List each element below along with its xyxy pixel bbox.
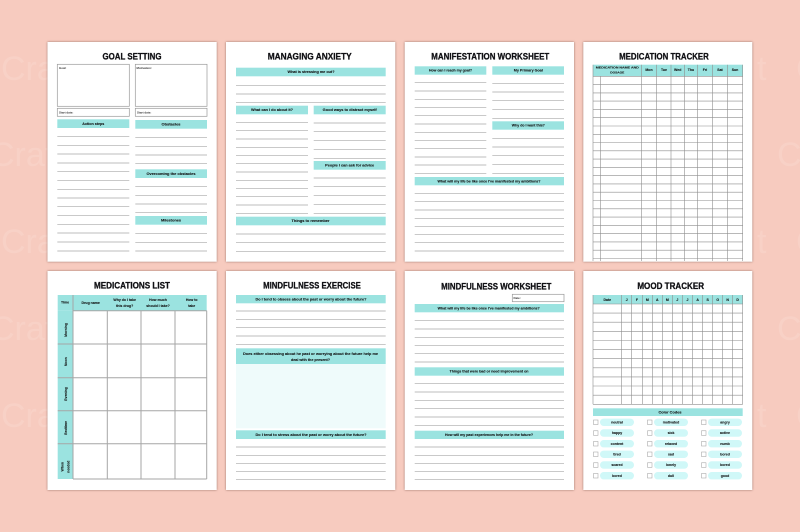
panel: managing anxiety <box>226 42 395 262</box>
mood header row: J <box>687 298 689 302</box>
why lines <box>492 138 564 173</box>
table header row: How much <box>149 298 167 302</box>
why header <box>492 121 564 130</box>
stress header <box>236 430 386 439</box>
present header <box>236 348 386 364</box>
color code key: lonely <box>666 463 676 467</box>
table header row <box>58 295 207 311</box>
panel: mindfulness exercise <box>226 271 395 490</box>
life header <box>415 177 564 185</box>
date box <box>512 294 564 302</box>
color code key: bored <box>720 463 730 467</box>
time column: Bedtime <box>64 421 68 435</box>
color code key: scared <box>611 463 623 467</box>
start date box right: Start date: <box>137 110 151 114</box>
panel: goal setting <box>48 42 217 262</box>
things to remember header: Things to remember <box>292 219 330 223</box>
tracker header row: DOSAGE <box>610 71 624 75</box>
heading: mood tracker: MOOD TRACKER <box>637 281 704 291</box>
overcoming the obstacles header: Overcoming the obstacles <box>146 172 196 176</box>
table header row: Drug name <box>82 301 100 305</box>
tracker header row: Wed <box>674 68 681 72</box>
heading: mindfulness exercise: MINDFULNESS EXERCISE <box>263 281 361 291</box>
people header: People I can ask for advice <box>325 163 374 167</box>
heading: manifestation worksheet: MANIFESTATION WORKSHEET <box>431 52 550 62</box>
heading: managing anxiety: MANAGING ANXIETY <box>268 52 352 62</box>
color codes header: Color Codes <box>658 410 682 414</box>
color code key: tired <box>613 452 621 456</box>
color code key: dull <box>668 474 674 478</box>
heading: medication tracker: MEDICATION TRACKER <box>619 52 709 62</box>
color code key: active <box>720 431 730 435</box>
table header row: take <box>188 304 195 308</box>
past experiences header <box>415 431 564 439</box>
mood header row: A <box>696 298 699 302</box>
motivation box: Motivation: <box>136 66 152 70</box>
color code key: motivated <box>663 420 679 424</box>
what can I do header: What can I do about it? <box>251 108 293 112</box>
life header: What will my life be like once I've manifested my ambitions? <box>438 179 540 183</box>
tracker header row: Tue <box>661 68 667 72</box>
color code key: angry <box>720 420 730 424</box>
writing area <box>236 364 386 428</box>
goal box <box>57 64 129 106</box>
watermark text: Craft <box>1 223 75 261</box>
mood header row: O <box>716 298 719 302</box>
obsess lines <box>236 311 386 344</box>
tracker header row <box>593 65 743 76</box>
time column: Morning <box>64 323 68 337</box>
tracker header row: Thu <box>688 68 694 72</box>
mood header row: M <box>666 298 669 302</box>
tracker header row: MEDICATION NAME AND <box>596 66 640 70</box>
time column: When <box>60 462 64 471</box>
stressing lines <box>236 85 386 103</box>
table header row: this drug? <box>116 304 133 308</box>
watermark text: Craft <box>1 50 75 88</box>
obsess header <box>236 295 386 303</box>
motivation box <box>135 64 207 106</box>
distract header: Good ways to distract myself <box>323 108 378 112</box>
remember lines <box>236 234 386 252</box>
improvement header <box>415 367 564 376</box>
color code key: good <box>721 474 729 478</box>
tracker header row: Sat <box>717 68 724 72</box>
panel: mindfulness worksheet <box>405 271 574 490</box>
watermark text: t <box>757 50 767 88</box>
past experiences header: How will my past experiences help me in the future? <box>445 433 533 437</box>
people lines <box>314 178 386 213</box>
obstacles lines <box>135 137 207 164</box>
obstacles header: Obstacles <box>162 122 181 126</box>
overcoming lines <box>135 187 207 213</box>
table header row: Why do I take <box>113 298 136 302</box>
milestones lines <box>135 233 207 251</box>
ambitions header: What will my life be like once I've manifested my ambitions? <box>438 306 540 310</box>
reach goal header <box>415 66 486 75</box>
panel: mood tracker <box>583 271 752 490</box>
mood header row: J <box>676 298 678 302</box>
watermark text: t <box>757 397 767 435</box>
color codes header <box>593 408 743 416</box>
color code key: neutral <box>611 420 623 424</box>
mood header row: M <box>646 298 649 302</box>
start date box left: Start date: <box>59 110 73 114</box>
color code key: bored <box>612 474 622 478</box>
present header: Does either obsessing about he past or worrying about the future help me <box>243 352 378 356</box>
distract header <box>314 106 386 114</box>
heading: mindfulness worksheet: MINDFULNESS WORKSHEET <box>441 281 552 291</box>
why header: Why do I want this? <box>512 124 545 128</box>
reach goal lines <box>415 83 486 173</box>
mood header row: J <box>626 298 628 302</box>
mood header row: N <box>726 298 729 302</box>
primary goal header: My Primary Goal <box>514 69 543 73</box>
mood header row: Date <box>604 298 611 302</box>
reach goal header: How can I reach my goal? <box>429 69 472 73</box>
watermark text <box>0 50 800 435</box>
improvement lines <box>415 384 564 425</box>
table grid <box>58 295 207 479</box>
milestones header: Milestones <box>161 218 181 222</box>
stress lines <box>236 447 386 480</box>
table header row: should I take? <box>146 304 170 308</box>
stress header: Do I tend to stress about the past or worry about the future? <box>256 433 366 437</box>
stressing header: What is stressing me out? <box>288 70 334 74</box>
action steps lines <box>57 136 129 251</box>
time column: Evening <box>64 387 68 401</box>
color code key <box>594 419 742 479</box>
color code key: relaxed <box>665 442 677 446</box>
color code key: content <box>611 442 624 446</box>
panel: medications list <box>48 271 217 490</box>
distract lines <box>314 123 386 158</box>
past experiences lines <box>415 447 564 480</box>
tracker header row: Mon <box>645 68 653 72</box>
mood header row: D <box>736 298 739 302</box>
mood grid <box>593 295 743 404</box>
what can I do lines <box>236 123 308 213</box>
life lines <box>415 193 564 251</box>
time column: Noon <box>64 357 68 366</box>
time column <box>58 311 73 479</box>
obstacles header <box>135 120 207 129</box>
milestones header <box>135 216 207 225</box>
watermark text: Craft <box>1 397 75 435</box>
mood header row: A <box>656 298 659 302</box>
color code key: sick <box>668 431 674 435</box>
primary goal header <box>492 66 564 75</box>
table header row: Time <box>61 300 69 304</box>
tracker grid <box>593 65 743 261</box>
watermark text: t <box>757 223 767 261</box>
ambitions header <box>415 304 564 312</box>
improvement header: Things that were bad or need improvement on <box>450 370 528 374</box>
overcoming the obstacles header <box>135 169 207 178</box>
start date box left <box>57 108 129 116</box>
color code key: bored <box>720 452 730 456</box>
heading: goal setting: GOAL SETTING <box>102 52 162 62</box>
panel: medication tracker <box>583 42 752 262</box>
mood header row <box>593 295 743 304</box>
stressing header <box>236 68 386 76</box>
start date box right <box>135 108 207 116</box>
panel: manifestation worksheet <box>405 42 574 262</box>
color code key: numb <box>720 442 730 446</box>
date box: Date: <box>514 296 521 300</box>
action steps header: Action steps <box>82 122 104 126</box>
color code key: sad <box>668 452 674 456</box>
action steps header <box>57 119 129 128</box>
table header row: How to <box>186 298 198 302</box>
mood header row: F <box>636 298 639 302</box>
tracker header row: Sun <box>732 68 738 72</box>
color code key: happy <box>612 431 622 435</box>
people header <box>314 161 386 170</box>
heading: medications list: MEDICATIONS LIST <box>94 281 170 291</box>
primary goal lines <box>492 83 564 118</box>
time column: needed <box>66 461 70 473</box>
what can I do header <box>236 106 308 114</box>
goal box: Goal: <box>59 66 66 70</box>
ambitions lines <box>415 321 564 362</box>
present header: deal with the present? <box>291 358 330 362</box>
mood header row: S <box>707 298 710 302</box>
things to remember header <box>236 217 386 225</box>
tracker header row: Fri <box>703 68 707 72</box>
obsess header: Do I tend to obsess about the past or worry about the future? <box>256 297 366 301</box>
